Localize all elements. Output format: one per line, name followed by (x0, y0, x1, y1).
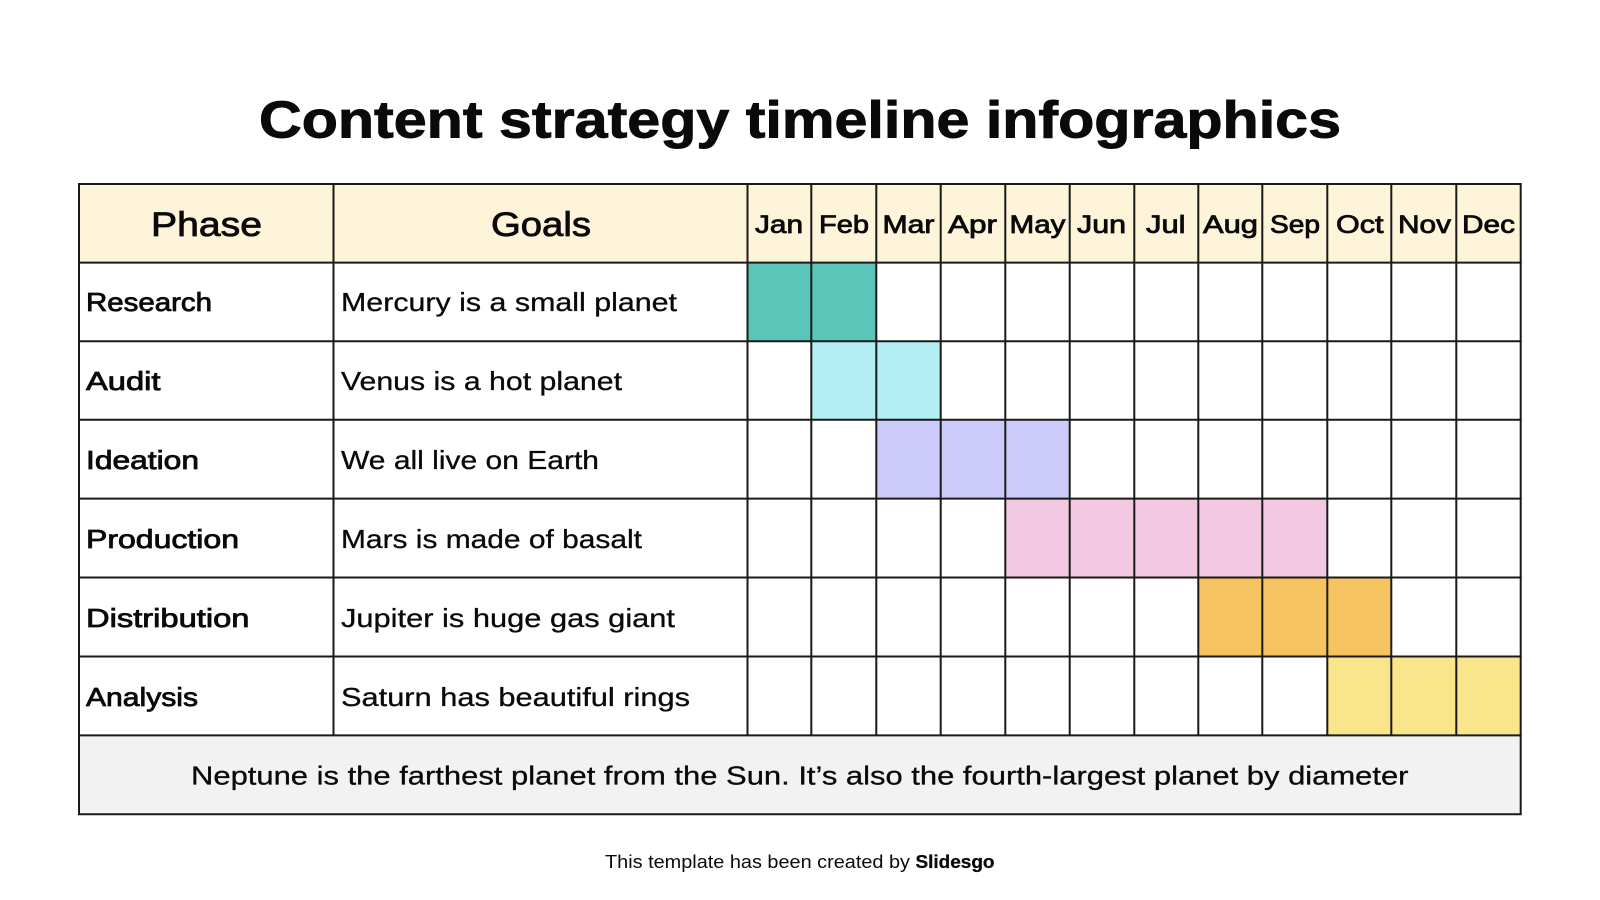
goal descriptions: We all live on Earth (341, 445, 599, 475)
gantt bar: Analysis Oct-Dec (1327, 656, 1521, 735)
month headings: Aug (1203, 211, 1258, 239)
table grid (78, 184, 1522, 814)
month headings: Jul (1146, 211, 1186, 239)
gantt bar: Research Jan-Feb (748, 263, 876, 341)
phase labels: Production (86, 524, 239, 554)
month headings (755, 211, 1515, 239)
phase labels: Audit (86, 366, 161, 396)
phase labels: Research (86, 287, 212, 317)
gantt bar: Production May-Sep (1005, 499, 1327, 578)
month headings: May (1010, 211, 1066, 239)
title: Content strategy timeline infographics (259, 92, 1341, 150)
month headings: Feb (819, 211, 869, 239)
phase labels: Ideation (86, 445, 199, 475)
month headings: Jan (755, 211, 803, 239)
month headings: Oct (1336, 211, 1384, 239)
month headings: Jun (1077, 211, 1126, 239)
month headings: Mar (882, 211, 934, 239)
phase labels (86, 287, 250, 712)
table header background (79, 184, 1521, 263)
footer note text: Neptune is the farthest planet from the Sun. It’s also the fourth-largest planet by diameter (191, 760, 1409, 790)
credit line: Slidesgo (916, 852, 995, 872)
month headings: Sep (1270, 211, 1320, 239)
footer note background (79, 735, 1521, 814)
goal descriptions (341, 287, 690, 712)
gantt bar: Ideation Mar-May (876, 420, 1070, 499)
credit line: This template has been created by (605, 852, 910, 872)
column heading: Phase: Phase (151, 206, 262, 244)
phase labels: Analysis (86, 682, 198, 712)
goal descriptions: Venus is a hot planet (341, 366, 623, 396)
month headings: Dec (1462, 211, 1515, 239)
phase labels: Distribution (86, 603, 250, 633)
month headings: Apr (948, 211, 997, 239)
gantt bar: Audit Feb-Mar (811, 341, 941, 420)
goal descriptions: Jupiter is huge gas giant (341, 603, 676, 633)
column heading: Goals: Goals (491, 206, 591, 244)
goal descriptions: Mars is made of basalt (341, 524, 643, 554)
gantt bar: Distribution Aug-Oct (1198, 578, 1391, 656)
goal descriptions: Mercury is a small planet (341, 287, 678, 317)
panel: timeline table (78, 184, 1522, 814)
goal descriptions: Saturn has beautiful rings (341, 682, 690, 712)
month headings: Nov (1398, 211, 1452, 239)
